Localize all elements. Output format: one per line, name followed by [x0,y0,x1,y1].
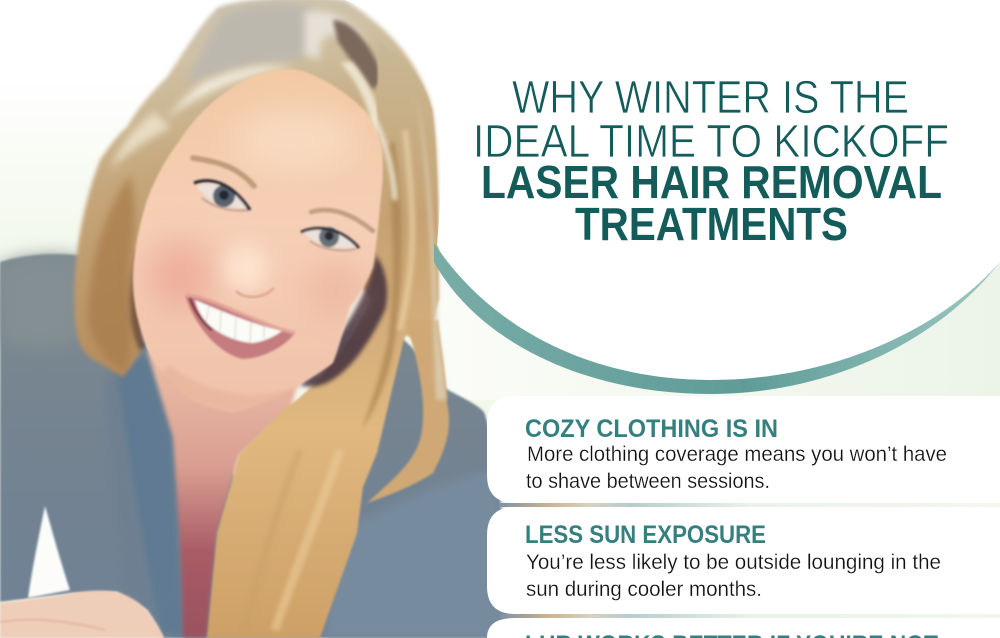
chest and neck [147,350,300,638]
card body [526,442,947,493]
strips of photo visible between cards [500,503,1000,507]
card: less sun exposure [487,507,1000,614]
hair: outer pale band [416,95,446,400]
card heading: COZY CLOTHING IS IN [525,415,778,443]
hair: long front strand [207,40,438,638]
card body: sun during cooler months. [526,577,762,601]
hair: dark parting [333,20,384,90]
hair: outer lock [367,320,449,503]
white circle panel behind title [345,0,1000,382]
hair: back and top [74,0,438,377]
hair: strand by temple [340,62,384,135]
teal crescent arc [434,243,1000,394]
title line 2: IDEAL TIME TO KICKOFF [473,115,949,167]
card body [526,550,941,601]
card body: More clothing coverage means you won’t have [527,442,947,466]
sweater [0,254,515,638]
face: jaw shading [160,362,335,412]
face [133,69,383,412]
eyebrows [193,158,373,231]
title line 3: LASER HAIR REMOVAL [481,156,942,208]
hair: light streaks [245,115,412,630]
sweater: drape fold [115,352,183,638]
title line 1: WHY WINTER IS THE [512,71,909,123]
hand [0,591,164,638]
background: right side tint [430,230,1000,400]
card heading: LESS SUN EXPOSURE [525,521,766,549]
left eye [194,181,250,210]
card body: to shave between sessions. [526,469,770,493]
hair: grey highlights at crown [110,4,368,170]
face: forehead highlight [235,110,355,170]
cheek blush [148,239,212,311]
sweater: right sleeve shading [325,470,512,638]
hair: left lock shading [88,175,135,372]
nose [224,244,274,297]
hair: dark shadow behind jaw [300,255,387,387]
photo: smiling woman [0,0,515,638]
sweater: shoulder highlight [0,256,85,348]
card body: You’re less likely to be outside lounging in the [526,550,941,574]
title line 4: TREATMENTS [575,198,848,250]
right eye [301,227,359,250]
smile [185,295,295,359]
card: cozy clothing [487,396,1000,503]
card: LHR works better (cut off at page edge) [487,618,1000,638]
gap under arm [28,506,70,598]
title [473,71,949,250]
hair: brown shaded band beside face [362,140,402,430]
